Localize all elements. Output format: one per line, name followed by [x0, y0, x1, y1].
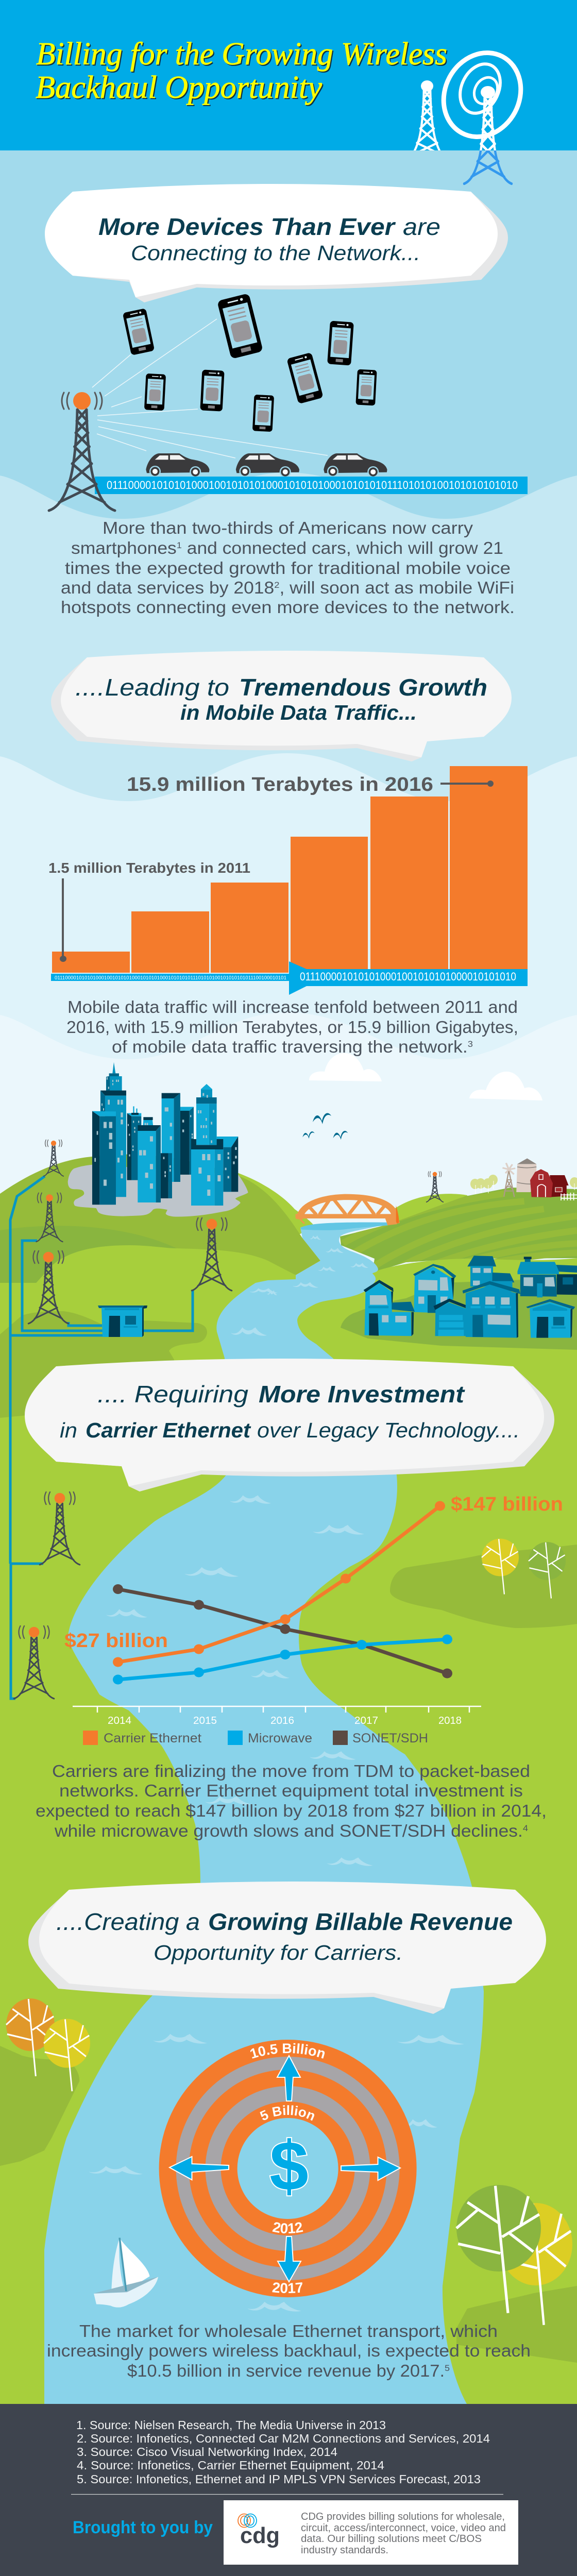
speech bubble: billable revenue: Opportunity for Carriers.	[154, 1941, 403, 1964]
target graphic: revenue growth rings: 2017	[272, 2282, 302, 2293]
icon: birds	[302, 1113, 348, 1140]
icon: cdg logo	[238, 2514, 280, 2548]
icon: hut	[98, 1306, 147, 1337]
text block: revenue: The market for wholesale Ethernet transport, which	[79, 2321, 498, 2341]
icon: network towers	[14, 1140, 443, 1699]
sponsor panel: cdg: CDG provides billing solutions for wholesale,	[301, 2511, 505, 2522]
sources list: 4. Source: Infonetics, Carrier Ethernet Equipment, 2014	[77, 2459, 384, 2472]
text block: devices: smartphones	[71, 538, 169, 557]
text block: revenue: $10.5 billion in service revenue by 2017.	[127, 2361, 431, 2380]
text block: devices: More than two-thirds of Americans now carry	[103, 518, 473, 537]
target graphic: revenue growth rings	[159, 2040, 417, 2297]
line chart: investment: 2016	[270, 1715, 294, 1726]
sources list: 3. Source: Cisco Visual Networking Index, 2014	[77, 2445, 337, 2459]
line chart: investment: 2018	[438, 1715, 462, 1726]
speech bubble: more devices: are	[403, 213, 440, 240]
text block: devices: , will soon act as mobile WiFi	[279, 578, 514, 597]
speech bubble: tremendous growth: Tremendous Growth	[239, 674, 487, 701]
network cables	[10, 1176, 193, 1699]
data bar: 011100001010101000100101010100010101010001010101011101010100101010101010	[107, 479, 518, 492]
speech bubble: more investment: Carrier Ethernet	[86, 1418, 251, 1442]
text block: traffic: 2016, with 15.9 million Terabytes, or 15.9 billion Gigabytes,	[66, 1018, 518, 1037]
signal lines from tower	[92, 319, 328, 458]
bar chart: mobile data traffic: 1.5 million Terabytes in 2011	[48, 860, 250, 876]
footer panel	[0, 2404, 577, 2576]
target graphic: revenue growth rings: $	[269, 2127, 309, 2205]
landscape: hills	[0, 1155, 577, 2404]
text block: devices: times the expected growth for traditional mobile voice	[65, 558, 511, 578]
sources list: 2. Source: Infonetics, Connected Car M2M Connections and Services, 2014	[77, 2432, 490, 2445]
text block: devices: and data services by 2018	[61, 578, 259, 597]
chart legend: Carrier Ethernet	[104, 1731, 201, 1745]
icon: cdg logo: cdg	[240, 2523, 280, 2548]
title	[36, 37, 447, 105]
chart legend	[83, 1731, 428, 1745]
target graphic: revenue growth rings: 5 Billion	[260, 2105, 314, 2121]
clouds	[309, 1053, 542, 1100]
chart legend: Microwave	[248, 1731, 312, 1745]
icon: trees by chart	[482, 1538, 566, 1599]
speech bubble: more investment: over Legacy Technology....	[257, 1418, 520, 1442]
text block: revenue: increasingly powers wireless backhaul, is expected to reach	[47, 2341, 531, 2360]
text block: devices	[61, 518, 515, 617]
target graphic: revenue growth rings: 10.5 Billion	[250, 2043, 325, 2059]
icon: city skyline	[68, 1062, 248, 1217]
landscape: river	[44, 1222, 484, 2404]
text block: devices: 1	[177, 540, 182, 550]
sponsor panel: cdg: data. Our billing solutions meet C/BOS	[301, 2533, 482, 2545]
speech bubble: more devices	[45, 184, 508, 302]
icon: smartphones	[123, 293, 377, 432]
line chart: investment: 2014	[108, 1715, 131, 1726]
line chart: investment	[64, 1494, 563, 1726]
header band	[0, 0, 577, 150]
text block: traffic: Mobile data traffic will increase tenfold between 2011 and	[67, 997, 518, 1016]
title: Billing for the Growing Wireless	[36, 37, 447, 72]
line chart: investment: $27 billion	[64, 1630, 168, 1652]
sources list: 1. Source: Nielsen Research, The Media Universe in 2013	[76, 2418, 386, 2432]
text block: devices: 2	[274, 580, 279, 590]
icon: header towers with signal	[413, 50, 523, 185]
speech bubble: billable revenue	[28, 1882, 546, 2014]
line chart: investment: 2017	[354, 1715, 378, 1726]
bar chart: mobile data traffic: 15.9 million Terabytes in 2016	[127, 774, 433, 795]
speech bubble: more investment: in	[60, 1418, 77, 1442]
speech bubble: tremendous growth: in Mobile Data Traffic...	[180, 701, 417, 724]
text block: revenue	[47, 2321, 531, 2380]
sponsor panel: cdg: circuit, access/interconnect, voice, video and	[301, 2522, 506, 2534]
text block: investment: Carriers are finalizing the move from TDM to packet-based	[52, 1761, 530, 1781]
sponsor panel: cdg: industry standards.	[301, 2545, 388, 2556]
speech bubble: more devices: Connecting to the Network...	[131, 241, 420, 265]
text block: devices: hotspots connecting even more devices to the network.	[61, 598, 515, 617]
icon: sailboat	[94, 2238, 158, 2308]
icon: transmission tower	[49, 392, 115, 511]
icon: trees left	[6, 1998, 90, 2091]
target graphic: revenue growth rings: 2012	[272, 2222, 303, 2233]
text block: traffic: of mobile data traffic traversing the network.	[112, 1037, 442, 1056]
text block: investment: networks. Carrier Ethernet equipment total investment is	[59, 1781, 523, 1800]
speech bubble: billable revenue: Growing Billable Revenue	[208, 1908, 513, 1935]
icon: bridge	[296, 1197, 399, 1225]
speech bubble: more investment: .... Requiring	[97, 1381, 248, 1408]
line chart: investment: 2015	[193, 1715, 217, 1726]
icon: trees right	[456, 2185, 572, 2325]
text block: investment: while microwave growth slows and SONET/SDH declines.	[55, 1821, 491, 1840]
sources list	[76, 2418, 490, 2486]
speech bubble: tremendous growth: ....Leading to	[75, 674, 229, 701]
houses	[364, 1256, 577, 1338]
bar chart: mobile data traffic: 011100001010101000100101010100010101010001010101011101010100101010101011100100010101	[55, 975, 286, 981]
title: Backhaul Opportunity	[36, 70, 322, 105]
text block: traffic: 3	[468, 1039, 473, 1049]
chart legend: SONET/SDH	[352, 1731, 428, 1745]
line chart: investment: $147 billion	[451, 1494, 563, 1515]
icon: cars	[146, 453, 387, 478]
speech bubble: tremendous growth	[51, 651, 512, 761]
text block: devices: and connected cars, which will grow 21	[182, 538, 503, 557]
speech bubble: more investment	[25, 1359, 554, 1492]
text block: revenue: 5	[445, 2363, 450, 2373]
speech bubble: more investment: More Investment	[259, 1381, 465, 1408]
speech bubble: billable revenue: ....Creating a	[56, 1908, 200, 1935]
farm: trees, windmill, silo, barn and fence	[470, 1158, 577, 1200]
text block: investment: 4	[523, 1823, 528, 1833]
text block: investment: expected to reach $147 billion by 2018 from $27 billion in 2014,	[36, 1801, 547, 1820]
speech bubble: more devices: More Devices Than Ever	[98, 213, 396, 240]
sponsor panel: cdg	[224, 2500, 518, 2565]
bar chart: mobile data traffic	[48, 766, 528, 995]
data bar	[95, 477, 528, 494]
text block: traffic	[66, 997, 518, 1056]
text block: investment	[36, 1761, 547, 1840]
sources list: 5. Source: Infonetics, Ethernet and IP MPLS VPN Services Forecast, 2013	[77, 2472, 481, 2486]
bar chart: mobile data traffic: 0111000010101010001001010101000010101010	[300, 970, 516, 983]
brought to you by: Brought to you by	[73, 2518, 213, 2537]
